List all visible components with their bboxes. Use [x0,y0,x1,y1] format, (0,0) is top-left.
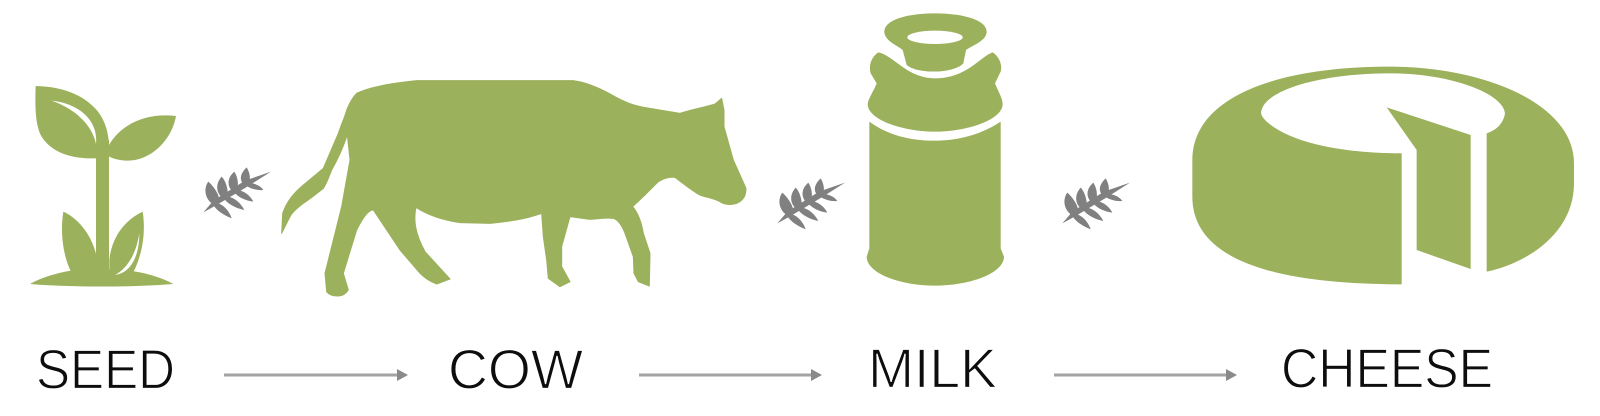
arrow: seed to cow [224,369,408,381]
icon: milk can [867,13,1004,286]
label: MILK: MILK [868,336,997,400]
arrow: cow to milk [639,369,822,381]
icon: cheese wheel [1192,67,1574,284]
label: SEED: SEED [36,338,175,400]
icon: cow [282,81,746,296]
icon: seedling [30,86,176,286]
icon: wheat sprig 2 [777,178,845,229]
icon: wheat sprig 3 [1062,178,1130,229]
label: CHEESE: CHEESE [1281,336,1493,400]
arrow: milk to cheese [1054,369,1237,381]
label: COW: COW [448,338,583,400]
icon: wheat sprig 1 [203,167,271,218]
